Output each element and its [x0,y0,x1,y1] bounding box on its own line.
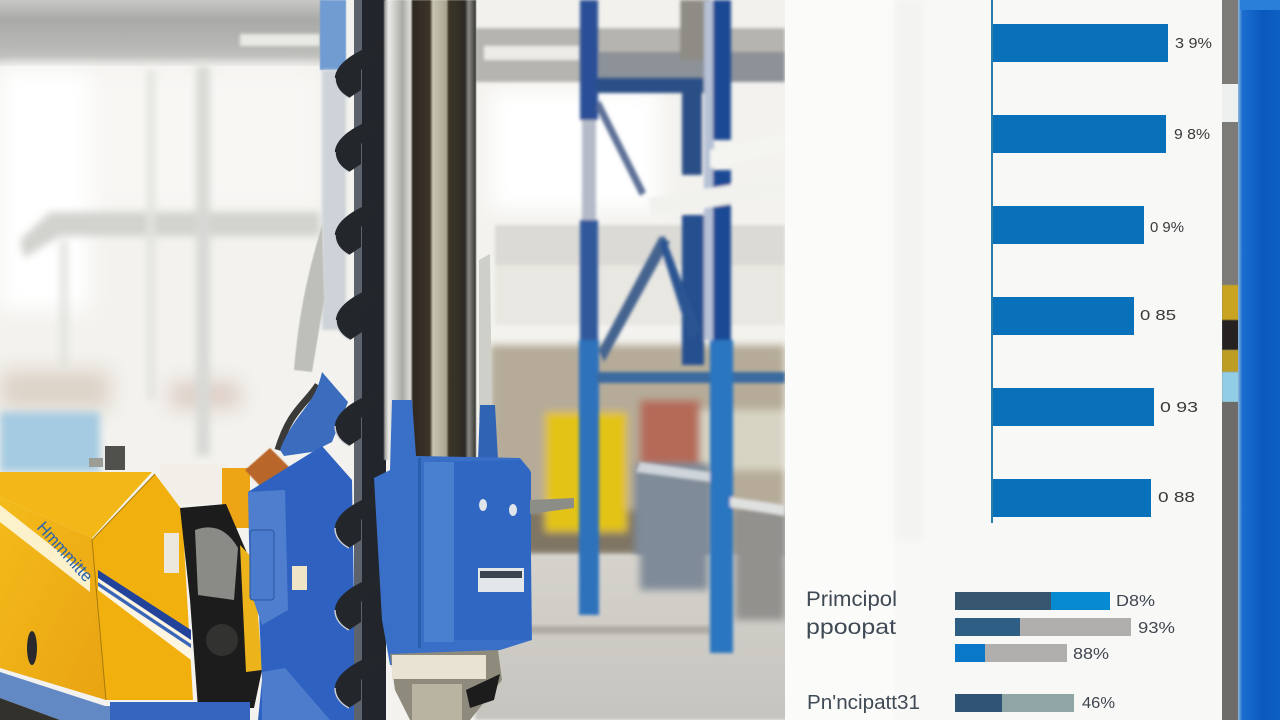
bar 6 [993,479,1195,517]
stacked bar 3 [955,644,1109,663]
bar 3: 0 9% [1150,219,1184,236]
machine brand lettering: Hmmmitte [33,518,97,586]
bar 5: 0 93 [1160,399,1198,416]
background: right edge strip and blue column [1222,0,1280,720]
bar 6: 0 88 [1158,489,1195,506]
background: pale blue strip and hose beside the mast [278,0,346,450]
background: blurred factory interior [0,0,790,720]
bar 1 [993,24,1212,62]
blue rig body [110,372,356,720]
bar 5 [993,388,1198,426]
label: proposal: ppoopat [806,616,896,639]
stacked bar 4: 46% [1082,695,1115,712]
stacked bar 2 [955,618,1175,637]
bar 4: 0 85 [1140,307,1176,324]
background: blue steel racking [579,0,785,653]
stacked bar 1: D8% [1116,593,1155,610]
bar 4 [993,297,1176,335]
stacked bar 2: 93% [1138,620,1175,637]
drilling mast: auger and steel guide columns [335,0,492,720]
stacked bar 4 [955,694,1115,712]
blue drive block [374,400,574,720]
warning sticker [292,566,307,590]
label: Principal 3: Pn'ncipatt31 [807,692,920,714]
label: Principal: Primcipol [806,588,897,611]
stacked bar 3: 88% [1073,646,1109,663]
bar 3 [993,206,1184,244]
legend labels and stacked bars [806,588,1175,714]
bar chart: horizontal blue bars [991,0,1212,523]
yellow power unit [0,446,292,720]
bar 2: 9 8% [1174,126,1210,143]
data plate [478,568,524,592]
bar 1: 3 9% [1175,35,1212,52]
warning sticker [164,533,179,573]
bar 2 [993,115,1210,153]
stacked bar 1 [955,592,1155,610]
panel: white data panel [785,0,1222,720]
